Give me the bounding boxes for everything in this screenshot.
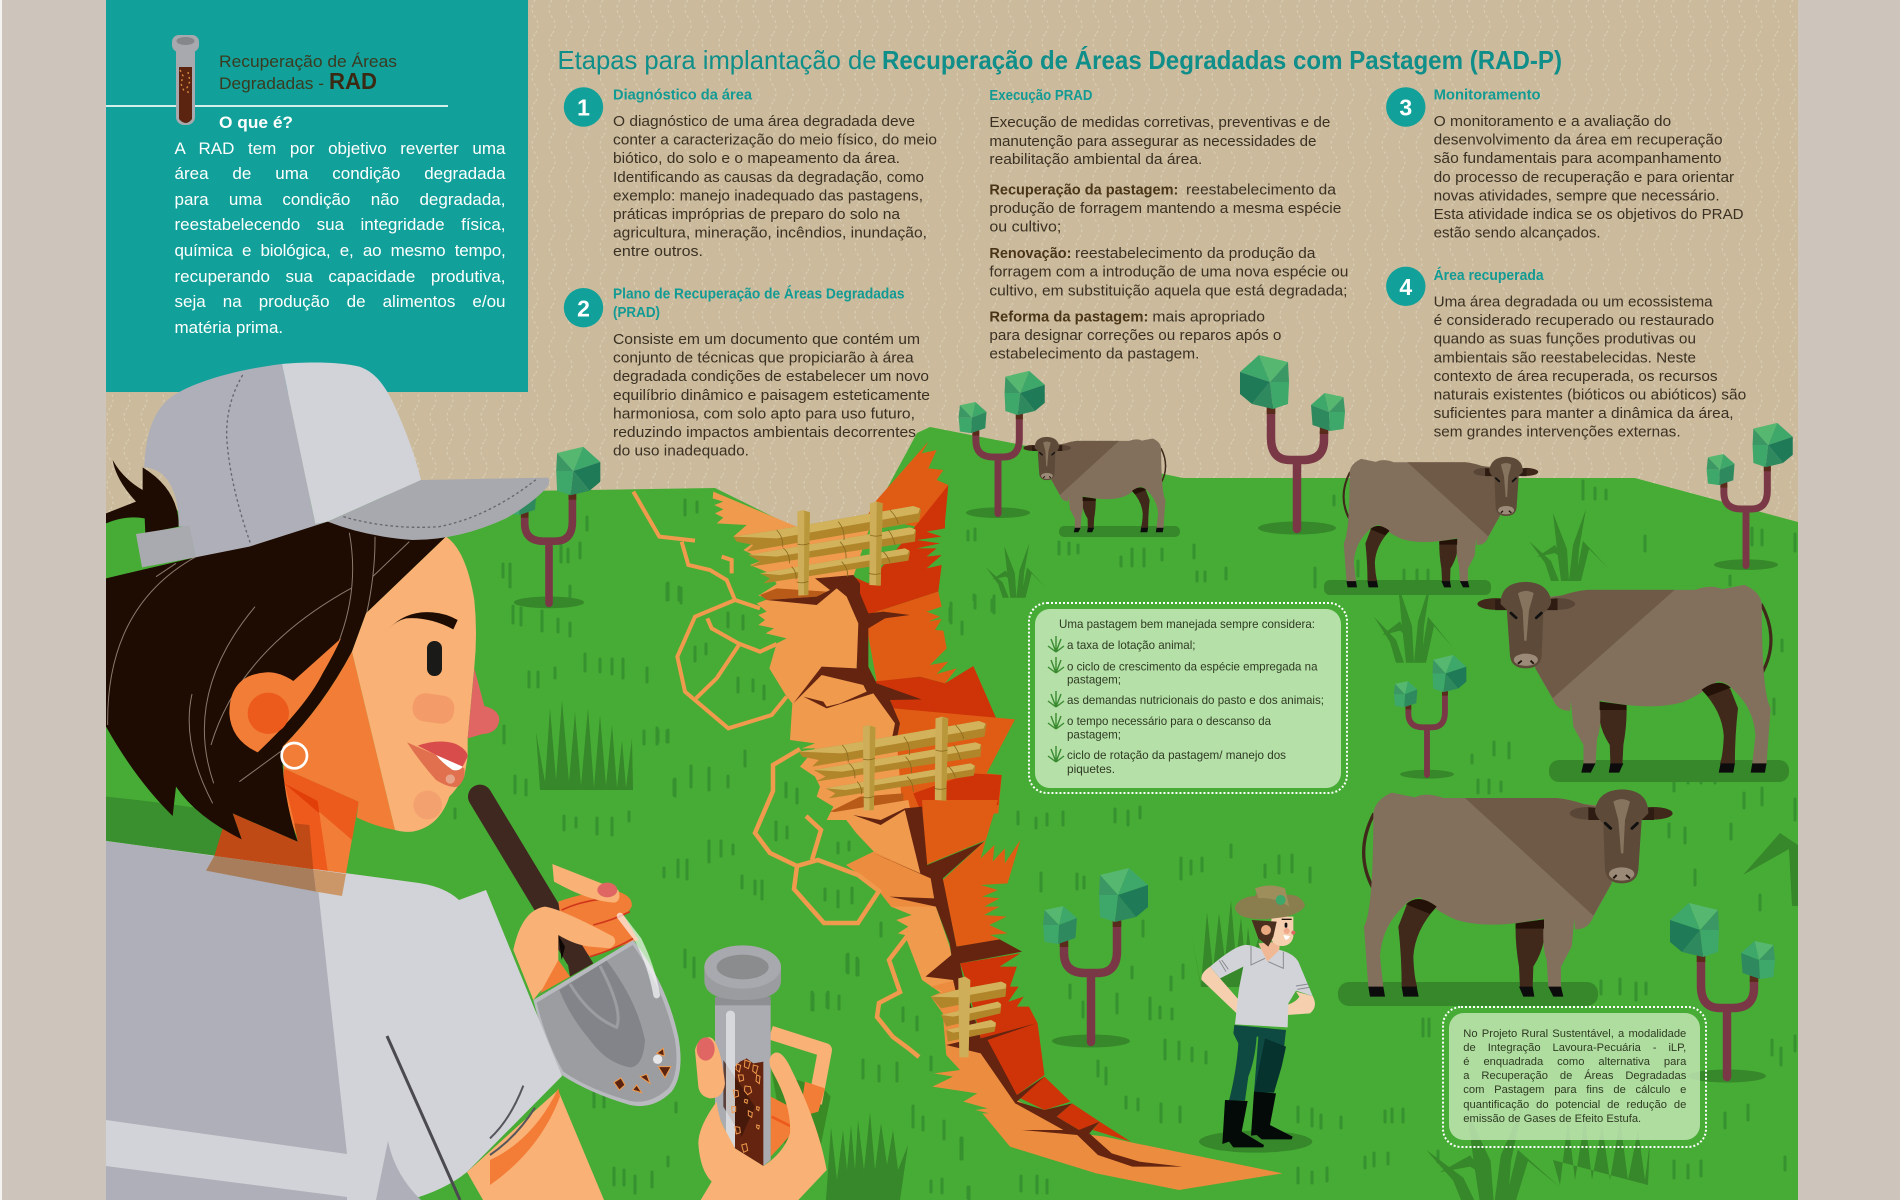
step 3: monitoramento <box>1386 86 1744 242</box>
text block: definition of RAD: seja na produção de alimentos e/ou <box>174 292 506 311</box>
step 1: diagnóstico: conter a caracterização do meio físico, do meio <box>613 132 937 149</box>
step 1: diagnóstico: Diagnóstico da área <box>613 86 753 104</box>
step 3: monitoramento: do processo de recuperação e para orientar <box>1434 169 1734 186</box>
step 1: diagnóstico: biótico, do solo e o mapeamento da área. <box>613 150 900 167</box>
woman: hair strands <box>108 533 409 803</box>
column: execução PRAD: estabelecimento da pastagem. <box>989 346 1199 363</box>
step 1: diagnóstico: O diagnóstico de uma área degradada deve <box>613 113 915 130</box>
text block: Projeto Rural Sustentável <box>1463 1028 1686 1125</box>
step 2: plano PRAD: harmoniosa, com solo apto para uso futuro, <box>613 405 915 422</box>
icon: header test tube <box>172 35 199 125</box>
woman: shirt <box>106 841 562 1200</box>
heading: RAD title: Degradadas - <box>219 74 324 93</box>
erosion: lower channel <box>831 800 1282 1190</box>
step 3: monitoramento: Esta atividade indica se os objetivos do PRAD <box>1434 206 1744 223</box>
step 3: monitoramento: novas atividades, sempre que necessário. <box>1434 187 1720 204</box>
heading: RAD title <box>219 52 397 94</box>
woman: cheek and face <box>283 537 499 832</box>
step 4: área recuperada <box>1386 267 1746 441</box>
callout: pasture management box: a taxa de lotação animal; <box>1067 638 1196 652</box>
column: execução PRAD: reabilitação ambiental da área. <box>989 151 1202 168</box>
text block: definition of RAD: matéria prima. <box>174 318 283 337</box>
column: execução PRAD <box>989 87 1348 363</box>
chart: erosion gully <box>633 442 1282 1190</box>
erosion: branching cracks on grass <box>755 749 919 1057</box>
text block: definition of RAD: reestabelecendo sua integridade física, <box>174 215 506 234</box>
text block: definition of RAD: área de uma condição degradada <box>174 164 506 183</box>
column: execução PRAD: cultivo, em substituição aquela que está degradada; <box>989 282 1347 299</box>
erosion: upper banks and cracks <box>633 442 1015 820</box>
column: execução PRAD: Recuperação da pastagem: <box>989 182 1178 198</box>
tree: beside cap <box>506 447 600 608</box>
woman: arm <box>467 1088 604 1200</box>
step 4: área recuperada: sem grandes intervenções externas. <box>1434 424 1681 441</box>
step 3: monitoramento: Monitoramento <box>1434 86 1541 104</box>
callout: pasture management box: o tempo necessário para o descanso da <box>1067 714 1271 728</box>
step 4: área recuperada: é considerado recuperado ou restaurado <box>1434 312 1714 329</box>
text block: definition of RAD <box>174 138 506 337</box>
callout: pasture management box: ciclo de rotação da pastagem/ manejo dos <box>1067 748 1286 762</box>
column: execução PRAD: produção de forragem mantendo a mesma espécie <box>989 200 1341 217</box>
text block: definition of RAD: para uma condição não degradada, <box>174 190 506 209</box>
step 3: monitoramento: estão sendo alcançados. <box>1434 225 1601 242</box>
text block: Projeto Rural Sustentável: quantificação do potencial de redução de <box>1463 1099 1686 1111</box>
column: execução PRAD: Execução PRAD <box>989 87 1093 104</box>
panel: beige background <box>106 0 1798 526</box>
icon: leafy grass clumps <box>986 509 1798 1200</box>
heading: main title: Recuperação de Áreas Degradadas com Pastagem (RAD-P) <box>882 45 1562 75</box>
step 2: plano PRAD: do uso inadequado. <box>613 443 749 460</box>
column: execução PRAD: Reforma da pastagem: <box>989 308 1148 326</box>
callout: pasture management box: o ciclo de crescimento da espécie empregada na <box>1067 660 1318 674</box>
cow: large left facing <box>1477 582 1789 782</box>
step 1: diagnóstico: agricultura, mineração, incêndios, inundação, <box>613 225 927 242</box>
callout: pasture management box <box>1029 603 1347 793</box>
step 4: área recuperada: suficientes para manter a dinâmica da área, <box>1434 405 1734 422</box>
woman: head and neck <box>106 522 499 896</box>
step 4: área recuperada: 4 <box>1399 274 1412 300</box>
callout: pasture management box: pastagem; <box>1067 672 1121 686</box>
chart: green pasture ground <box>106 427 1798 1200</box>
icon: test tube with soil in hand <box>695 945 831 1200</box>
step 1: diagnóstico: práticas impróprias de preparo do solo na <box>613 206 901 223</box>
woman: ear <box>229 638 341 752</box>
column: execução PRAD: Execução de medidas corretivas, preventivas e de <box>989 114 1330 131</box>
tree: top center <box>1240 355 1345 534</box>
step 3: monitoramento: 3 <box>1399 94 1412 120</box>
step 3: monitoramento: desenvolvimento da área em recuperação <box>1434 132 1723 149</box>
step 4: área recuperada: quando as suas funções produtivas ou <box>1434 331 1696 348</box>
callout: pasture management box: as demandas nutricionais do pasto e dos animais; <box>1067 693 1324 707</box>
cow: small left facing <box>1023 437 1180 537</box>
callout: Projeto Rural Sustentável box background <box>1443 1007 1706 1147</box>
heading: RAD title: RAD <box>329 68 377 94</box>
step 3: monitoramento: O monitoramento e a avaliação do <box>1434 113 1671 130</box>
heading: main title <box>558 45 1562 75</box>
text block: Projeto Rural Sustentável: é enquadrada como alternativa para <box>1463 1056 1686 1068</box>
callout: pasture management box: pastagem; <box>1067 728 1121 742</box>
step 1: diagnóstico: 1 <box>577 94 590 120</box>
panel: teal header box <box>106 0 528 392</box>
step 4: área recuperada: naturais existentes (bióticos ou abióticos) são <box>1434 386 1746 404</box>
step 4: área recuperada: Área recuperada <box>1434 267 1544 284</box>
column: execução PRAD: manutenção para assegurar as necessidades de <box>989 133 1316 150</box>
step 3: monitoramento: são fundamentais para acompanhamento <box>1434 150 1722 167</box>
icon: bamboo fence bottom <box>931 977 1007 1057</box>
column: execução PRAD: forragem com a introdução de uma nova espécie ou <box>989 264 1348 281</box>
step 4: área recuperada: contexto de área recuperada, os recursos <box>1434 368 1718 385</box>
tree: beside farmer <box>1043 868 1148 1048</box>
woman: neck <box>206 768 359 896</box>
column: execução PRAD: reestabelecimento da <box>1186 182 1337 198</box>
text block: Projeto Rural Sustentável: No Projeto Rural Sustentável, a modalidade <box>1463 1028 1686 1040</box>
woman scientist <box>106 362 831 1200</box>
heading: O que é?: O que é? <box>219 113 293 132</box>
column: execução PRAD: reestabelecimento da produção da <box>1075 245 1316 262</box>
woman: shoulder shadow on grass <box>106 797 229 856</box>
step 1: diagnóstico: entre outros. <box>613 243 703 260</box>
tree: bottom right <box>1670 903 1775 1082</box>
callout: pasture management box: piquetes. <box>1067 762 1115 776</box>
farmer figure <box>1199 885 1315 1153</box>
step 1: diagnóstico: exemplo: manejo inadequado das pastagens, <box>613 187 923 204</box>
step 1: diagnóstico <box>564 86 937 260</box>
tree: top center-left <box>959 371 1045 518</box>
text block: Projeto Rural Sustentável: com Pastagem para fins de cálculo e <box>1463 1084 1686 1096</box>
woman: cap <box>106 362 549 567</box>
icon: bamboo fence top <box>733 502 921 596</box>
text block: Projeto Rural Sustentável: emissão de Gases de Efeito Estufa. <box>1463 1113 1641 1125</box>
step 2: plano PRAD: degradada condições de estabelecer um novo <box>613 368 929 385</box>
step 4: área recuperada: ambientais são reestabelecidas. Neste <box>1434 349 1696 366</box>
text block: definition of RAD: recuperando sua capacidade produtiva, <box>174 267 506 286</box>
step 2: plano PRAD: Plano de Recuperação de Áreas Degradadas <box>613 286 904 302</box>
callout: pasture management box: Uma pastagem bem manejada sempre considera: <box>1059 617 1315 631</box>
step 2: plano PRAD: Consiste em um documento que contém um <box>613 331 920 348</box>
icon: earring <box>282 743 307 768</box>
step 4: área recuperada: Uma área degradada ou um ecossistema <box>1434 294 1713 310</box>
cow: upper right facing <box>1324 457 1538 595</box>
step 2: plano PRAD <box>564 286 930 460</box>
column: execução PRAD: ou cultivo; <box>989 218 1061 236</box>
step 2: plano PRAD: reduzindo impactos ambientais decorrentes <box>613 424 916 441</box>
tree: top right <box>1707 423 1793 570</box>
woman: hair <box>106 522 446 842</box>
icon: shovel in hand <box>480 797 681 1106</box>
step 2: plano PRAD: equilíbrio dinâmico e paisagem esteticamente <box>613 387 930 404</box>
icon: bamboo fence middle <box>799 717 986 811</box>
cow: large right facing <box>1338 789 1673 1006</box>
step 2: plano PRAD: (PRAD) <box>613 304 660 321</box>
tree: small middle right <box>1394 655 1466 779</box>
step 2: plano PRAD: conjunto de técnicas que propiciarão à área <box>613 350 914 367</box>
icon: spiky grass tufts <box>536 700 1650 1200</box>
heading: main title: Etapas para implantação de <box>558 45 876 75</box>
grass ticks <box>455 481 1795 1200</box>
text block: definition of RAD: A RAD tem por objetivo reverter uma <box>174 138 506 158</box>
column: execução PRAD: para designar correções ou reparos após o <box>989 327 1281 344</box>
step 1: diagnóstico: Identificando as causas da degradação, como <box>613 169 924 186</box>
column: execução PRAD: Renovação: <box>989 245 1071 262</box>
column: execução PRAD: mais apropriado <box>1152 308 1265 326</box>
text block: definition of RAD: química e biológica, e, ao mesmo tempo, <box>174 241 506 260</box>
step 2: plano PRAD: 2 <box>577 296 590 322</box>
heading: RAD title: Recuperação de Áreas <box>219 52 397 71</box>
text block: Projeto Rural Sustentável: de Integração Lavoura-Pecuária - iLP, <box>1463 1042 1686 1054</box>
text block: Projeto Rural Sustentável: a Recuperação de Áreas Degradadas <box>1463 1070 1686 1082</box>
